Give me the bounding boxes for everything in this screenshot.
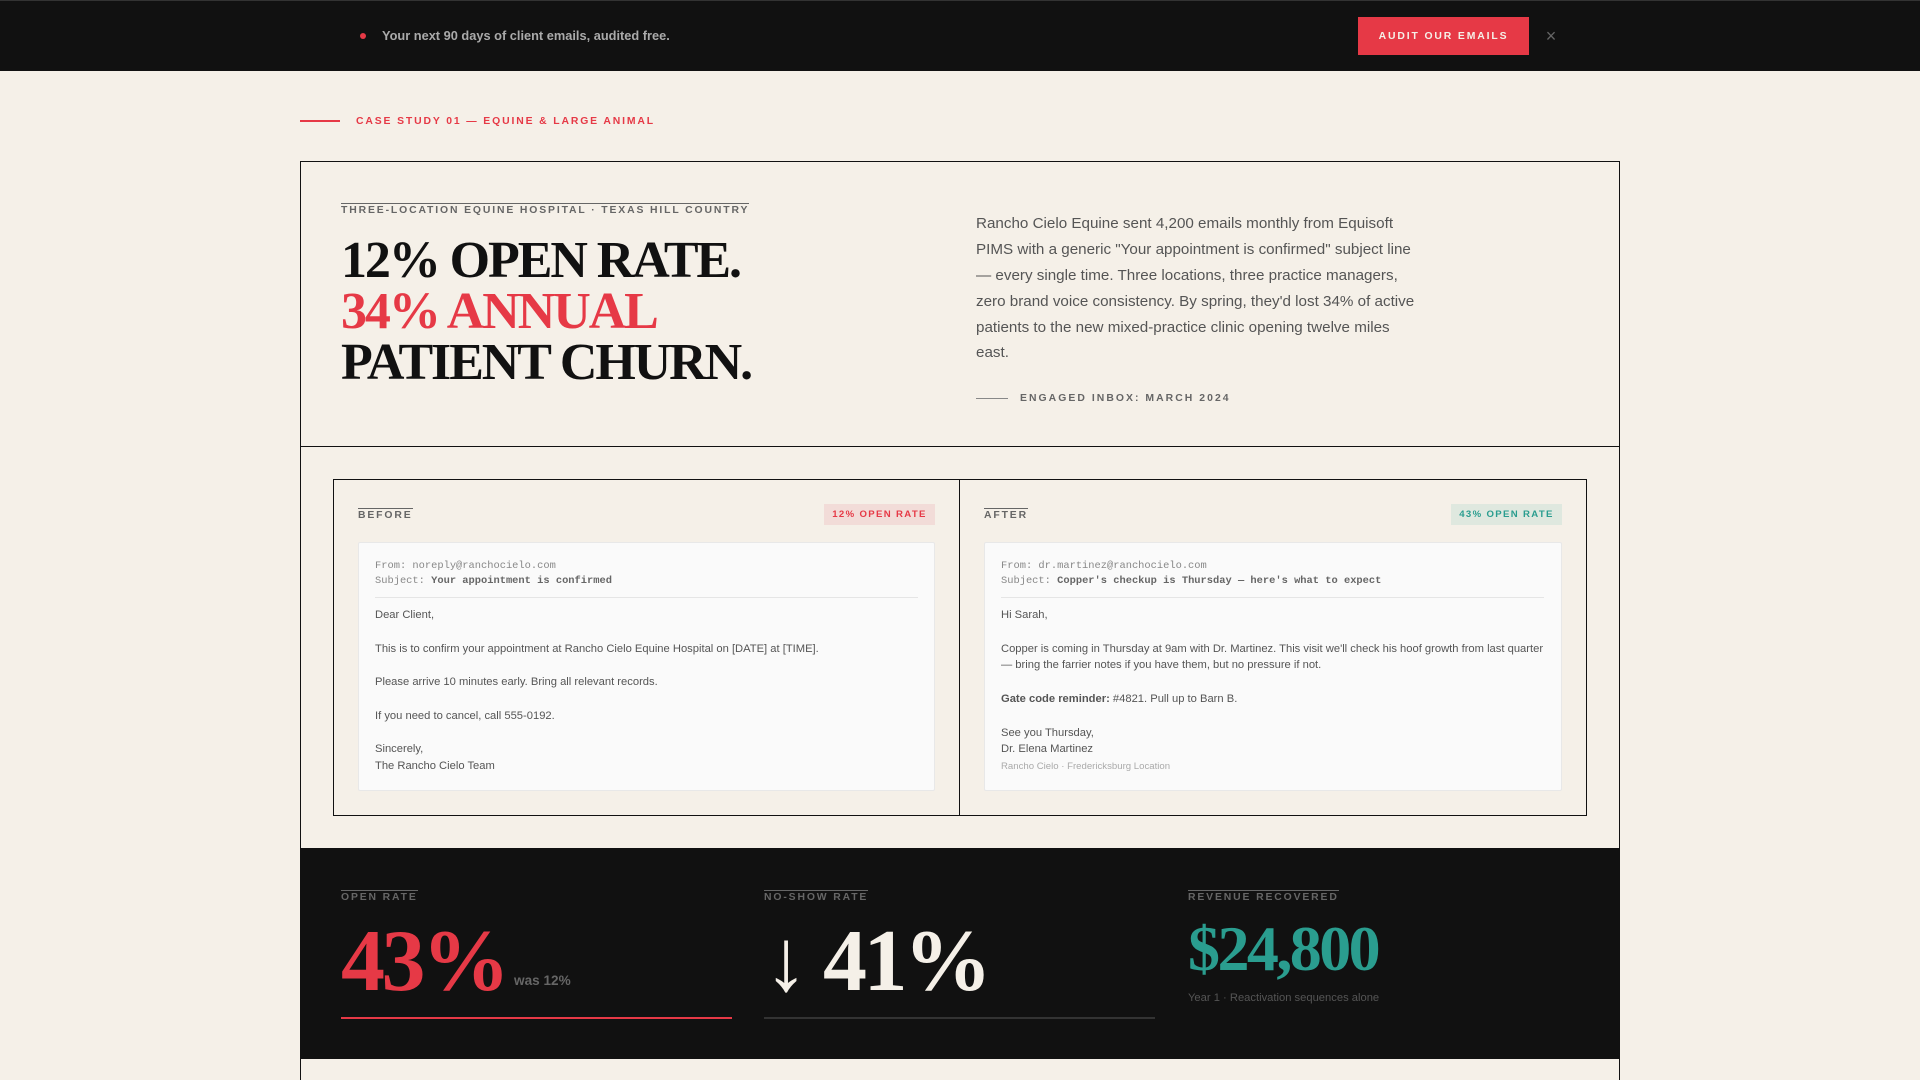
intro paragraph: Rancho Cielo Equine sent 4,200 emails monthly from Equisoft [976, 215, 1393, 232]
panel: results stats [301, 848, 1619, 1059]
badge: 12% open rate: 12% OPEN RATE [832, 509, 927, 520]
panel: hero [301, 162, 1619, 447]
intro paragraph [976, 215, 1414, 361]
headline [341, 232, 751, 391]
stat: no-show rate [764, 890, 1155, 1019]
eyebrow text: CASE STUDY 01 — EQUINE & LARGE ANIMAL [356, 116, 655, 127]
email headers: Subject: Your appointment is confirmed [375, 575, 612, 587]
stat label: NO-SHOW RATE [764, 892, 868, 903]
headline: PATIENT CHURN. [341, 334, 751, 391]
date text: ENGAGED INBOX: MARCH 2024 [1020, 393, 1231, 404]
stat: open rate [341, 890, 732, 1019]
before label: BEFORE [358, 510, 413, 521]
main case study frame [300, 161, 1620, 1080]
stat value: $24,800 [1188, 913, 1378, 984]
email headers: Subject: Copper's checkup is Thursday — here's what to expect [1001, 575, 1381, 587]
email body: Hi Sarah, Copper is coming in Thursday at 9am with Dr. Martinez. This visit we'll check his hoof growth from last quarter — bring the farrier notes if you have them, but no pressure if not. Gate code reminder: #4821. Pull up to Barn B. See you Thursday, Dr. Elena Martinez [1001, 609, 1543, 755]
after label: AFTER [984, 510, 1028, 521]
badge: 12% open rate [824, 504, 935, 525]
eyebrow rule [300, 120, 340, 122]
panel: after [984, 504, 1562, 791]
email headers [375, 560, 612, 587]
panel: before [334, 480, 960, 815]
headline: 34% ANNUAL [341, 283, 657, 340]
email body: Dear Client, This is to confirm your appointment at Rancho Cielo Equine Hospital on [DATE] at [TIME]. Please arrive 10 minutes early. Bring all relevant records. If you need to cancel, call 555-0192. Sincerely, The Rancho Cielo Team [375, 609, 819, 772]
stat value: 43% [341, 913, 506, 1010]
badge: 43% open rate: 43% OPEN RATE [1459, 509, 1554, 520]
date rule [976, 398, 1008, 399]
stat label: REVENUE RECOVERED [1188, 892, 1339, 903]
location signature: Rancho Cielo · Fredericksburg Location [1001, 761, 1170, 772]
header divider [1001, 597, 1544, 598]
badge: 43% open rate [1451, 504, 1562, 525]
button: audit our emails: AUDIT OUR EMAILS [1379, 31, 1508, 42]
stat label: OPEN RATE [341, 892, 418, 903]
announcement text: Your next 90 days of client emails, audited free. [382, 28, 670, 43]
button: audit our emails [1358, 17, 1529, 55]
stat caption: Year 1 · Reactivation sequences alone [1188, 992, 1379, 1004]
email headers: From: dr.martinez@ranchocielo.com [1001, 560, 1207, 572]
intro paragraph: zero brand voice consistency. By spring, they'd lost 34% of active [976, 293, 1414, 310]
top announcement bar [0, 0, 1920, 71]
email headers [1001, 560, 1381, 587]
email card: after [984, 542, 1562, 791]
stat bar [341, 1017, 732, 1019]
headline: 12% OPEN RATE. [341, 232, 740, 289]
stat bar [764, 1017, 1155, 1019]
intro paragraph: — every single time. Three locations, three practice managers, [976, 267, 1398, 284]
icon: close: × [1546, 26, 1556, 46]
hero label: THREE-LOCATION EQUINE HOSPITAL · TEXAS HILL COUNTRY [341, 205, 749, 216]
stat value: ↓ 41% [764, 913, 988, 1010]
previous value: was 12% [514, 973, 571, 988]
intro paragraph: patients to the new mixed-practice clinic opening twelve miles [976, 319, 1390, 336]
header divider [375, 597, 918, 598]
intro paragraph: PIMS with a generic "Your appointment is confirmed" subject line [976, 241, 1411, 258]
email headers: From: noreply@ranchocielo.com [375, 560, 556, 572]
icon: red status dot [360, 33, 366, 39]
intro paragraph: east. [976, 344, 1009, 361]
email card: before [358, 542, 935, 791]
stat: revenue recovered [1188, 890, 1379, 1004]
panel: before and after comparison [333, 479, 1587, 816]
